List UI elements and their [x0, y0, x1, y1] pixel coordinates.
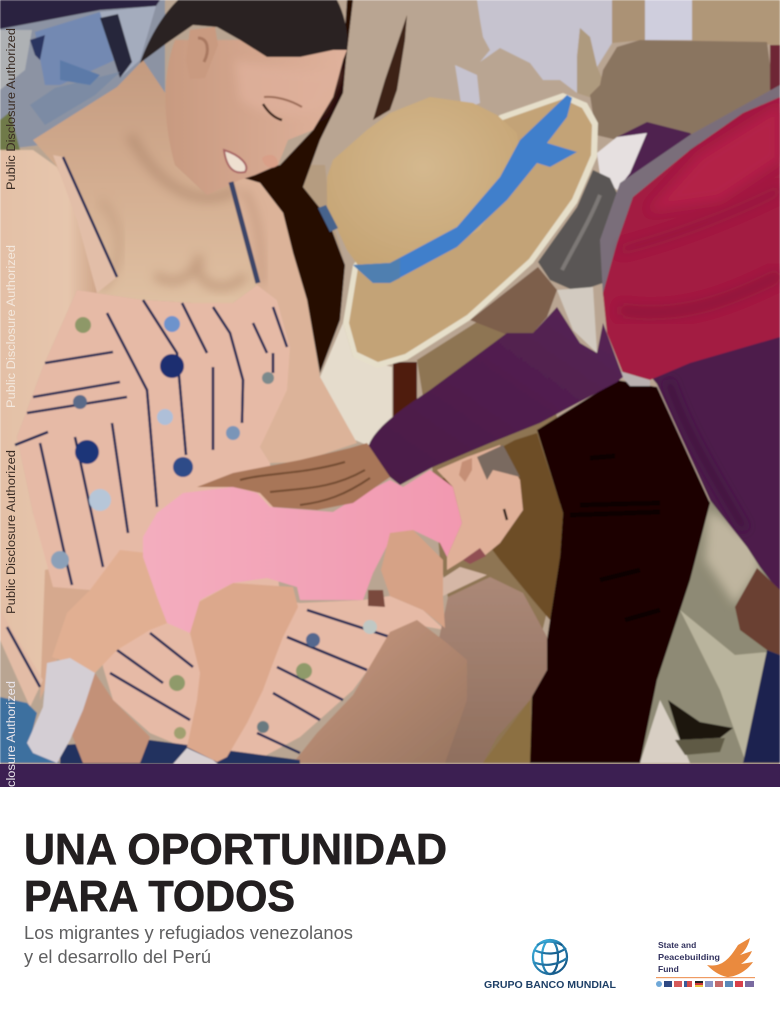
elderly woman: purple sleeve: [368, 307, 623, 485]
logo wordmark: [658, 940, 720, 974]
elderly woman: hand resting on baby: [197, 443, 390, 510]
title: [24, 825, 447, 921]
elderly woman: white shirt collar point: [557, 287, 597, 353]
baby: pink onesie, limbs and head: [27, 445, 523, 764]
subtitle: y el desarrollo del Perú: [24, 946, 211, 967]
baby sock: [27, 658, 95, 763]
watermark: clipped Disclosure Authorized, fourth instance: closure Authorized: [6, 681, 18, 787]
background figure at top left in blue-grey clothing: [0, 0, 165, 150]
watermark: Public Disclosure Authorized, first instance: Public Disclosure Authorized: [6, 28, 18, 190]
mother: dark hair: [140, 0, 348, 63]
hat crown: [327, 97, 520, 272]
watermark: Public Disclosure Authorized, second instance: Public Disclosure Authorized: [6, 245, 18, 408]
title: UNA OPORTUNIDAD: [24, 825, 447, 874]
hat brim: [343, 93, 598, 368]
icon: World Bank globe: [533, 940, 567, 974]
mother: pink floral dress with navy stripes: [0, 155, 487, 757]
photo: cover photograph of a mother, baby and elderly woman: [0, 0, 780, 765]
elderly woman: collar, shirt and grey hair: [538, 122, 700, 292]
logo: State and Peacebuilding Fund: [656, 938, 755, 987]
baby far leg: [187, 583, 298, 762]
logo wordmark: State and: [658, 940, 696, 950]
subtitle: Los migrantes y refugiados venezolanos: [24, 922, 353, 943]
navy dress stripes: [7, 157, 390, 753]
right-hand floor: [640, 500, 780, 763]
flags row: [656, 981, 754, 987]
blue ribbon: [353, 95, 577, 283]
purple band under photo: [0, 764, 780, 787]
straw hat with blue ribbon: [318, 93, 598, 368]
baby onesie: [143, 470, 462, 633]
dark trousers of the person behind: [530, 380, 710, 763]
divider line: [656, 977, 755, 978]
elderly woman: body, hand and skirt: [620, 330, 780, 763]
baby near leg: [52, 550, 170, 673]
mother: arm, neck, chest and shoulder skin: [0, 60, 357, 700]
mother: face and ear: [166, 27, 347, 195]
logo: Grupo Banco Mundial: GRUPO BANCO MUNDIAL: [484, 979, 617, 991]
mother: knee, thigh, jeans and hand: [0, 577, 547, 764]
icon: orange bird: [707, 938, 753, 977]
elderly woman: face in shadow: [470, 267, 557, 337]
logo: Grupo Banco Mundial: [484, 940, 617, 991]
left dress strap: [53, 155, 117, 293]
title: PARA TODOS: [24, 872, 295, 921]
logo wordmark: Peacebuilding: [658, 952, 720, 962]
baby arm: [381, 530, 445, 628]
dress flowers: [51, 316, 377, 739]
photo background: posterised wall and floor: [0, 0, 780, 765]
watermark: Public Disclosure Authorized, third instance: Public Disclosure Authorized: [6, 450, 18, 614]
baby head: [437, 445, 523, 570]
logo wordmark: Fund: [658, 964, 679, 974]
elderly woman: red shawl with grey border: [600, 85, 780, 386]
pale floor patch: [320, 323, 392, 445]
dark gap between mother and hat: [233, 0, 353, 373]
subtitle: [24, 922, 353, 967]
